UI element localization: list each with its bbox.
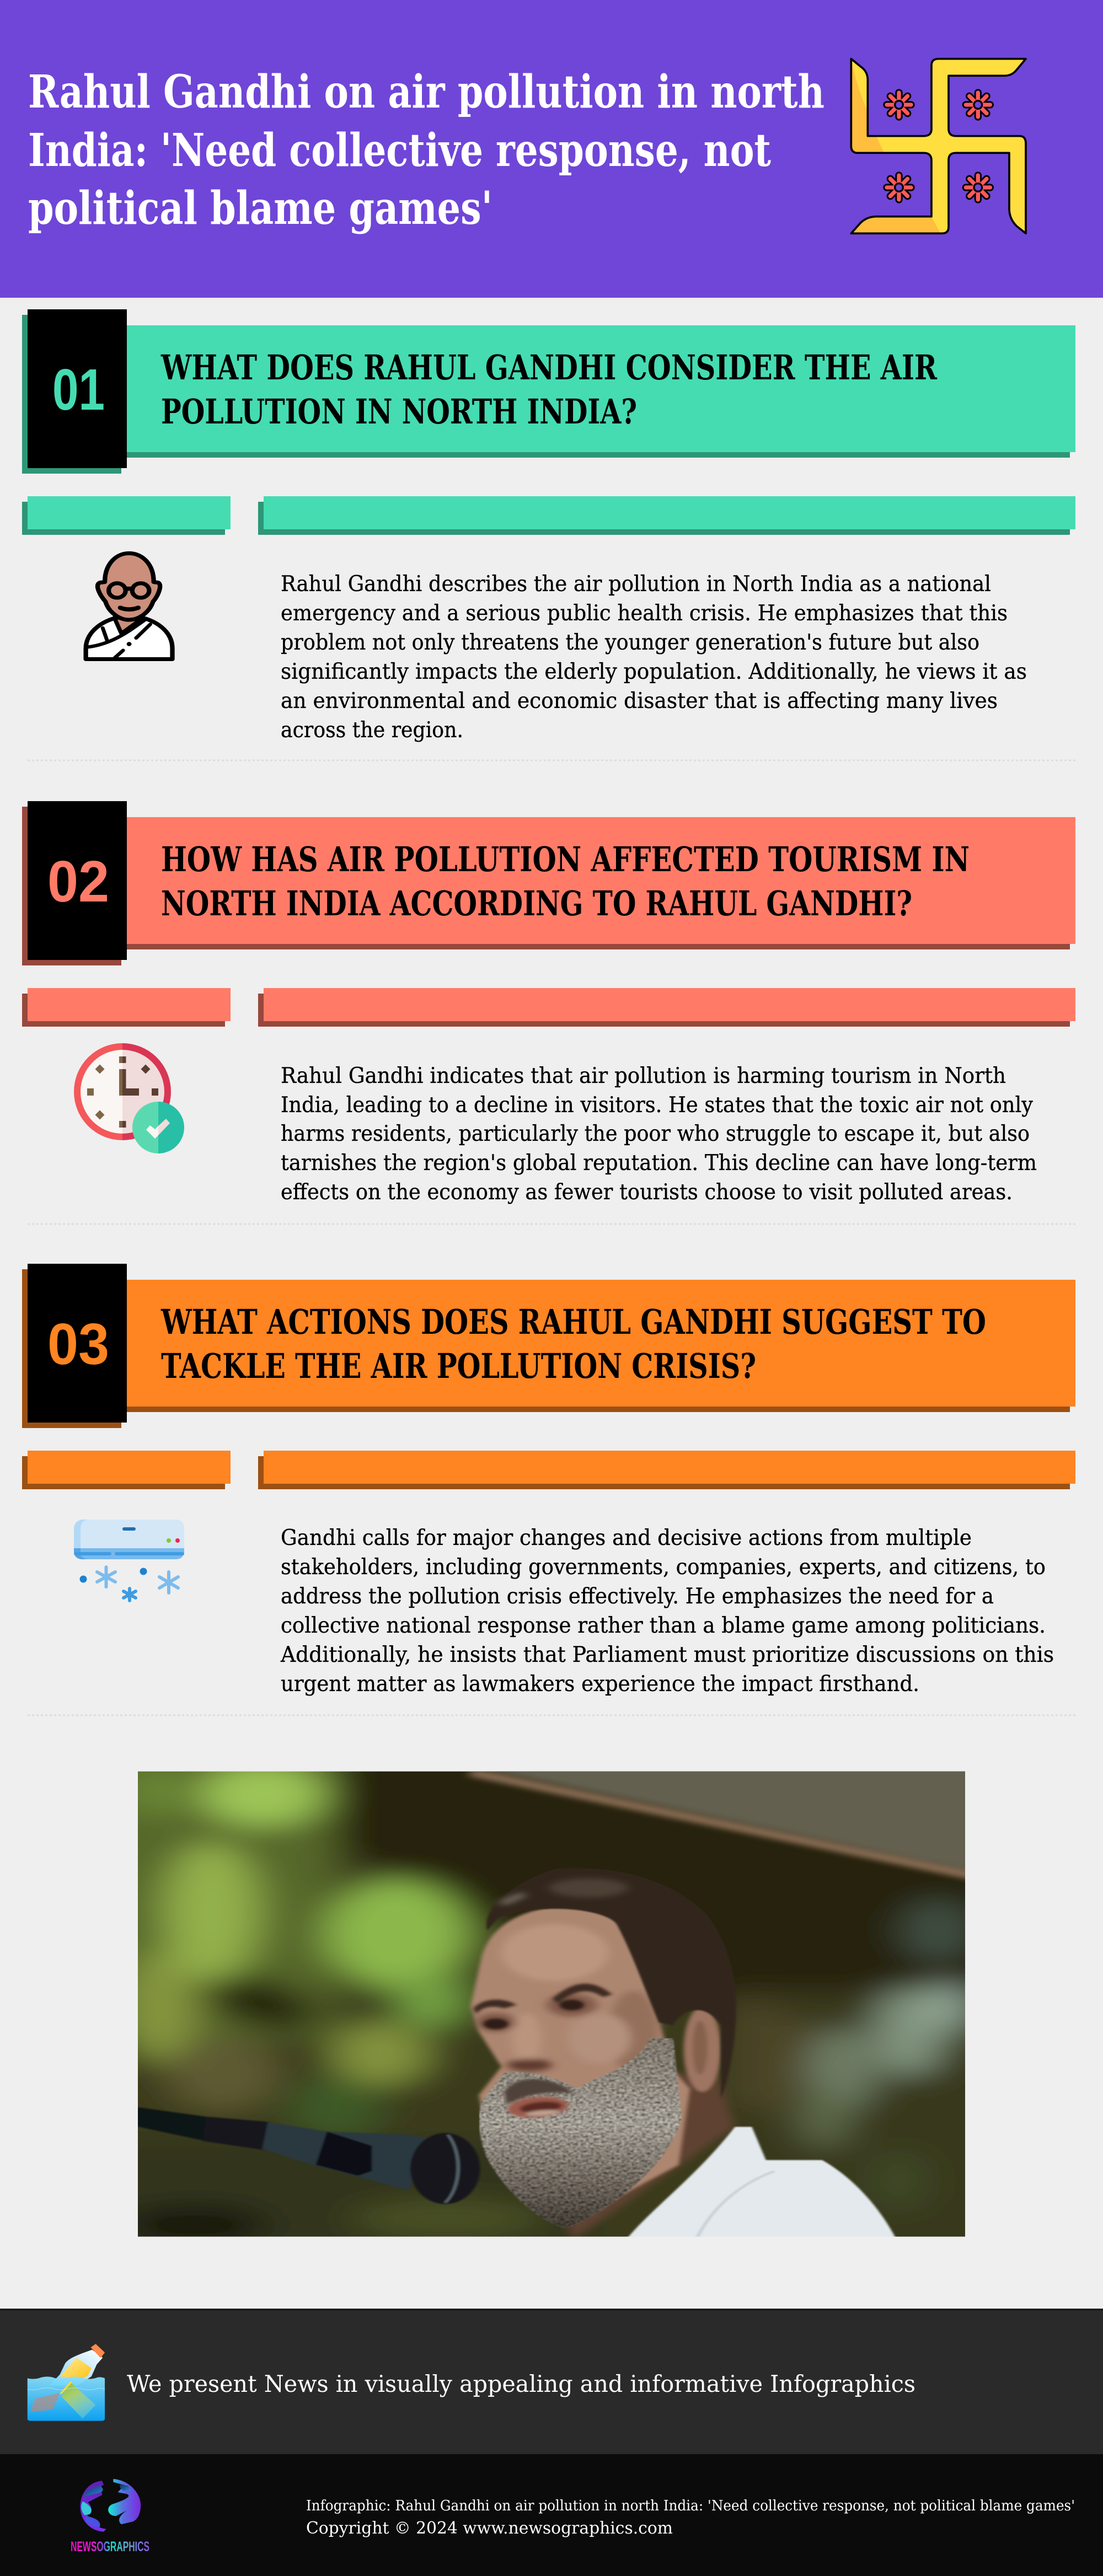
tagline text: We present News in visually appealing and informative Infographics [127, 2370, 915, 2397]
question bar 01 [22, 325, 1075, 458]
icon: air conditioner with snowflakes [74, 1520, 184, 1601]
answer text 03: collective national response rather than a blame game among politicians. [281, 1613, 1046, 1638]
icon: Hindu swastika symbol with flowers [851, 59, 1026, 233]
number badge 03: 03 [47, 1312, 109, 1377]
question bar 02 [22, 817, 1075, 949]
answer text 01 [281, 572, 1027, 743]
number badge 03 [22, 1264, 127, 1428]
title: Rahul Gandhi on air pollution in north [28, 66, 824, 119]
column bar right 03 [258, 1451, 1075, 1489]
title: political blame games' [28, 182, 492, 235]
answer text 02: effects on the economy as fewer tourists choose to visit polluted areas. [281, 1180, 1013, 1205]
number badge 01 [22, 309, 127, 474]
heading 02 [161, 839, 970, 924]
question bar 03 [22, 1280, 1075, 1412]
logo mark [80, 2479, 141, 2532]
column bar left 02 [22, 988, 231, 1027]
heading 03: TACKLE THE AIR POLLUTION CRISIS? [161, 1346, 756, 1386]
heading 01 [160, 347, 937, 432]
answer text 01: an environmental and economic disaster that is affecting many lives [281, 689, 998, 713]
number badge 01: 01 [52, 357, 105, 422]
title [28, 66, 824, 235]
photo: Rahul Gandhi speaking at a microphone [138, 1771, 965, 2236]
number badge 02 [22, 801, 127, 965]
column bar right 02 [258, 988, 1075, 1027]
answer text 03: address the pollution crisis effectively. He emphasizes the need for a [281, 1584, 994, 1609]
column bar right 01 [258, 496, 1075, 535]
answer text 01: problem not only threatens the younger generation's future but also [281, 630, 979, 655]
panel: section 03 [22, 1264, 1075, 1715]
answer text 02: tarnishes the region's global reputation. This decline can have long-term [281, 1151, 1037, 1176]
answer text 03: Gandhi calls for major changes and decisive actions from multiple [281, 1526, 972, 1550]
panel: footer [0, 2454, 1103, 2576]
icon: Gandhi figure with glasses [86, 553, 173, 659]
answer text 02: Rahul Gandhi indicates that air pollution is harming tourism in North [281, 1064, 1006, 1088]
answer text 03: urgent matter as lawmakers experience the impact firsthand. [281, 1672, 919, 1697]
answer text 02 [281, 1064, 1037, 1205]
column bar left 01 [22, 496, 231, 535]
heading 03 [160, 1302, 986, 1386]
panel: header [0, 0, 1103, 298]
answer text 01: Rahul Gandhi describes the air pollution in North India as a national [281, 572, 991, 597]
logo wordmark: NEWSOGRAPHICS [71, 2539, 149, 2554]
answer text 01: significantly impacts the elderly population. Additionally, he views it as [281, 659, 1027, 684]
title: India: 'Need collective response, not [28, 124, 771, 177]
answer text 03: stakeholders, including governments, companies, experts, and citizens, to [281, 1555, 1046, 1580]
heading 02: NORTH INDIA ACCORDING TO RAHUL GANDHI? [161, 883, 912, 924]
column bar left 03 [22, 1451, 231, 1489]
panel: section 01 [22, 309, 1075, 760]
answer text 03: Additionally, he insists that Parliament must prioritize discussions on this [280, 1643, 1054, 1667]
number badge 02: 02 [47, 849, 109, 914]
credit line: Infographic: Rahul Gandhi on air pollution in north India: 'Need collective response, not political blame games' [306, 2498, 1075, 2514]
logo: Newsographics [71, 2479, 149, 2554]
panel: section 02 [22, 801, 1075, 1224]
heading 01: POLLUTION IN NORTH INDIA? [161, 391, 637, 432]
answer text 01: across the region. [281, 718, 463, 743]
answer text 03 [280, 1526, 1054, 1697]
answer text 02: harms residents, particularly the poor who struggle to escape it, but also [281, 1121, 1030, 1146]
panel: tagline band [0, 2309, 1103, 2454]
icon: message in a bottle [28, 2344, 105, 2421]
answer text 01: emergency and a serious public health crisis. He emphasizes that this [281, 601, 1008, 626]
copyright line: Copyright © 2024 www.newsographics.com [306, 2519, 673, 2538]
answer text 02: India, leading to a decline in visitors. He states that the toxic air not only [281, 1093, 1033, 1118]
icon: clock with check badge [74, 1043, 184, 1153]
